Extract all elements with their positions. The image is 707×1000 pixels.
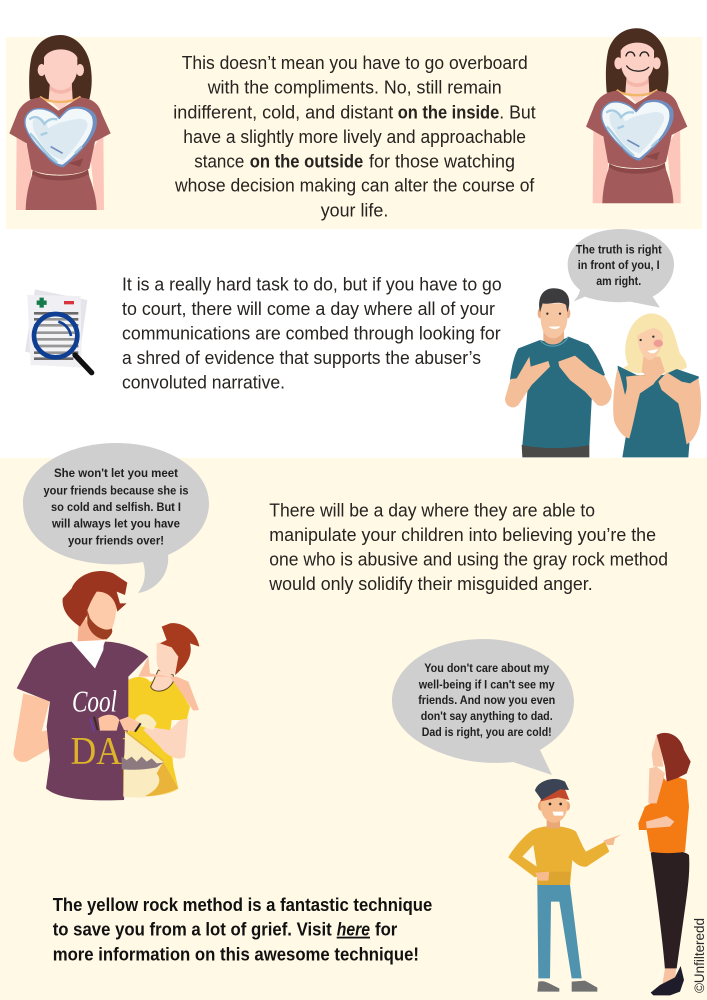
speech bubble: you don't care about my well-being: well-being if I can't see my	[418, 678, 555, 691]
text block: compliments paragraph: on the inside	[398, 102, 499, 122]
text block: compliments paragraph: your life.	[321, 200, 388, 220]
text block: children paragraph: manipulate your children into believing you’re the	[269, 525, 656, 545]
illustration: woman with ice heart, smiling	[586, 28, 687, 203]
speech bubble: the truth is right: in front of you, I	[578, 259, 660, 272]
text block: court evidence paragraph: It is a really hard task to do, but if you have to go	[122, 274, 502, 294]
speech bubble: the truth is right: am right.	[596, 275, 641, 288]
panel: top cream band	[6, 37, 702, 229]
text block: compliments paragraph: stance	[194, 152, 244, 172]
text block: court evidence paragraph: convoluted narrative.	[122, 372, 285, 392]
man figure	[505, 288, 612, 457]
woman figure	[613, 313, 701, 457]
speech bubble: the truth is right: The truth is right	[576, 243, 662, 256]
text block: court evidence paragraph: to court, there will come a day where all of your	[122, 299, 495, 319]
speech bubble: you don't care about my well-being	[392, 639, 574, 775]
text block: compliments paragraph: indifferent, cold, and distant	[173, 102, 393, 122]
call to action: yellow rock method: more information on this awesome technique!	[53, 944, 419, 964]
text block: court evidence paragraph: communications are combed through looking for	[122, 324, 501, 344]
text block: court evidence paragraph: a shred of evidence that supports the abuser’s	[122, 348, 481, 368]
text block: compliments paragraph: for those watching	[369, 152, 515, 172]
call to action: yellow rock method	[53, 895, 432, 964]
father figure: Cool	[72, 685, 117, 719]
speech bubble: she won't let you meet your friends: will always let you have	[51, 518, 181, 531]
icon: magnifier over documents	[25, 289, 92, 373]
panel: bottom cream section	[0, 458, 707, 1000]
text block: compliments paragraph: whose decision making can alter the course of	[174, 176, 535, 196]
text block: compliments paragraph: on the outside	[250, 152, 363, 172]
speech bubble: you don't care about my well-being: You don't care about my	[424, 662, 550, 675]
speech bubble: she won't let you meet your friends: your friends over!	[68, 534, 164, 547]
text block: compliments paragraph: with the compliments. No, still remain	[207, 78, 502, 98]
speech bubble: she won't let you meet your friends: your friends because she is	[44, 484, 188, 497]
illustration: father hugging child in cool dad shirt	[13, 571, 199, 800]
speech bubble: she won't let you meet your friends	[23, 443, 209, 593]
illustration: child pointing at mother	[508, 733, 691, 995]
call to action: yellow rock method: to save you from a lot of grief. Visit	[53, 920, 332, 940]
illustration: man and woman gesturing with speech bubble	[505, 229, 701, 457]
speech bubble: you don't care about my well-being: Dad is right, you are cold!	[422, 726, 552, 739]
text block: children paragraph: There will be a day where they are able to	[269, 500, 595, 520]
text block: compliments paragraph: have a slightly more lively and approachable	[183, 127, 526, 147]
speech bubble: she won't let you meet your friends: so cold and selfish. But I	[51, 501, 181, 514]
speech bubble: the truth is right	[568, 229, 674, 308]
child pointing	[508, 779, 622, 992]
text block: compliments paragraph	[173, 53, 536, 220]
text block: compliments paragraph: This doesn’t mean you have to go overboard	[182, 53, 528, 73]
text block: children paragraph: would only solidify their misguided anger.	[268, 574, 593, 594]
speech bubble: you don't care about my well-being: don't say anything to dad.	[421, 710, 553, 723]
mother figure	[638, 733, 691, 995]
speech bubble: she won't let you meet your friends: She won't let you meet	[54, 467, 178, 480]
father figure: DAD	[71, 728, 147, 772]
credit: copyright: ©Unfilteredd	[692, 918, 707, 993]
text block: compliments paragraph: . But	[499, 102, 536, 122]
speech bubble: you don't care about my well-being: friends. And now you even	[418, 694, 555, 707]
call to action: yellow rock method: The yellow rock method is a fantastic technique	[53, 895, 432, 915]
father figure	[13, 571, 148, 800]
illustration: woman with ice heart, blank face	[9, 35, 111, 210]
text block: children paragraph	[268, 500, 668, 594]
text block: court evidence paragraph	[122, 274, 502, 392]
text block: children paragraph: one who is abusive and using the gray rock method	[269, 550, 668, 570]
call to action: yellow rock method: here	[337, 920, 370, 940]
child figure with shark bag	[90, 623, 199, 797]
call to action: yellow rock method: for	[375, 920, 397, 940]
